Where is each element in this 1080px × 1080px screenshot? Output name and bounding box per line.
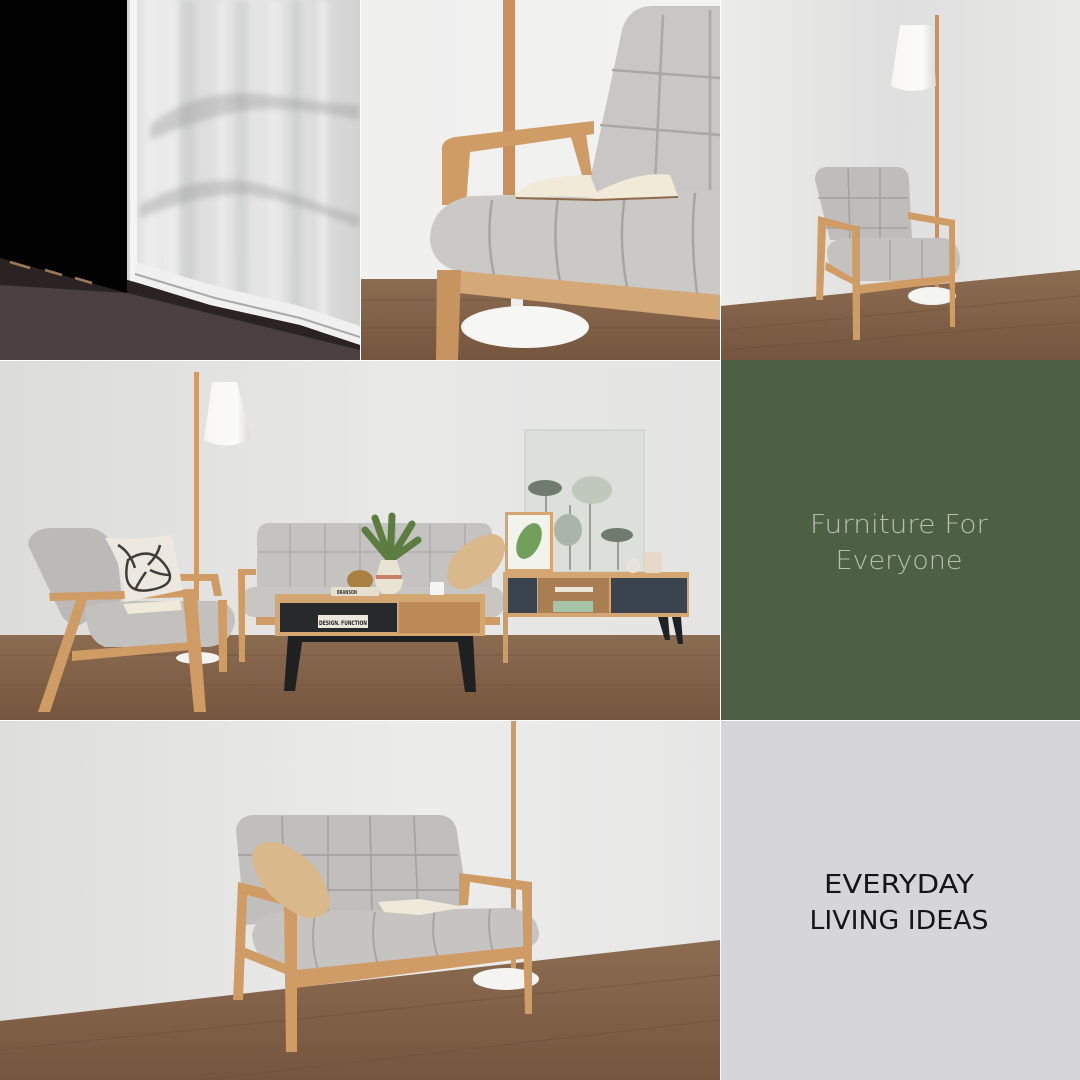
panel: armchair close-up photo xyxy=(361,0,720,360)
book on seat xyxy=(123,600,182,614)
floor lamp xyxy=(891,15,956,305)
panel: living room photo xyxy=(0,361,720,720)
round cushion xyxy=(447,534,505,589)
lamp pole and base xyxy=(473,721,539,990)
wooden floor xyxy=(0,940,720,1080)
lamp pole xyxy=(503,0,515,195)
sofa xyxy=(238,523,504,662)
candle and vases on console xyxy=(626,552,662,573)
tagline text: Furniture For xyxy=(810,510,988,540)
coffee table xyxy=(275,582,485,692)
headline text xyxy=(810,870,988,936)
coffee table: BRANSON xyxy=(337,590,357,596)
panel: green title block xyxy=(721,360,1080,720)
coffee table: DESIGN. FUNCTION xyxy=(319,620,367,627)
lamp base xyxy=(461,296,589,348)
carpet floor xyxy=(0,285,360,360)
tagline text xyxy=(810,510,988,576)
panel: grey title block xyxy=(721,721,1080,1080)
wooden floor xyxy=(721,270,1080,360)
floor lamp xyxy=(176,372,251,664)
wooden floor xyxy=(0,635,720,720)
framed leaf print xyxy=(505,512,553,572)
wooden floor xyxy=(361,279,720,360)
sheer curtain xyxy=(127,0,360,350)
plant in striped vase xyxy=(347,516,418,595)
tagline text: Everyone xyxy=(836,546,962,576)
headline text: EVERYDAY xyxy=(824,870,974,900)
panel: curtain photo xyxy=(0,0,360,360)
botanical wall art xyxy=(525,430,644,572)
media console xyxy=(503,572,689,663)
chair frame xyxy=(448,270,720,320)
chair seat xyxy=(430,190,720,295)
sofa frame xyxy=(233,873,532,1052)
headline text: LIVING IDEAS xyxy=(810,906,988,936)
cushion xyxy=(252,842,330,918)
chair arm xyxy=(442,121,594,205)
dark curtain xyxy=(0,0,127,293)
armchair xyxy=(815,167,960,340)
panel: armchair with lamp photo xyxy=(721,0,1080,360)
chair back xyxy=(590,6,720,200)
open book xyxy=(378,899,465,915)
sofa seat xyxy=(252,908,539,973)
foreground armchair xyxy=(28,528,235,712)
panel: loveseat photo xyxy=(0,721,720,1080)
open book xyxy=(516,174,678,200)
sofa back xyxy=(236,815,468,925)
floral cushion xyxy=(105,535,183,602)
